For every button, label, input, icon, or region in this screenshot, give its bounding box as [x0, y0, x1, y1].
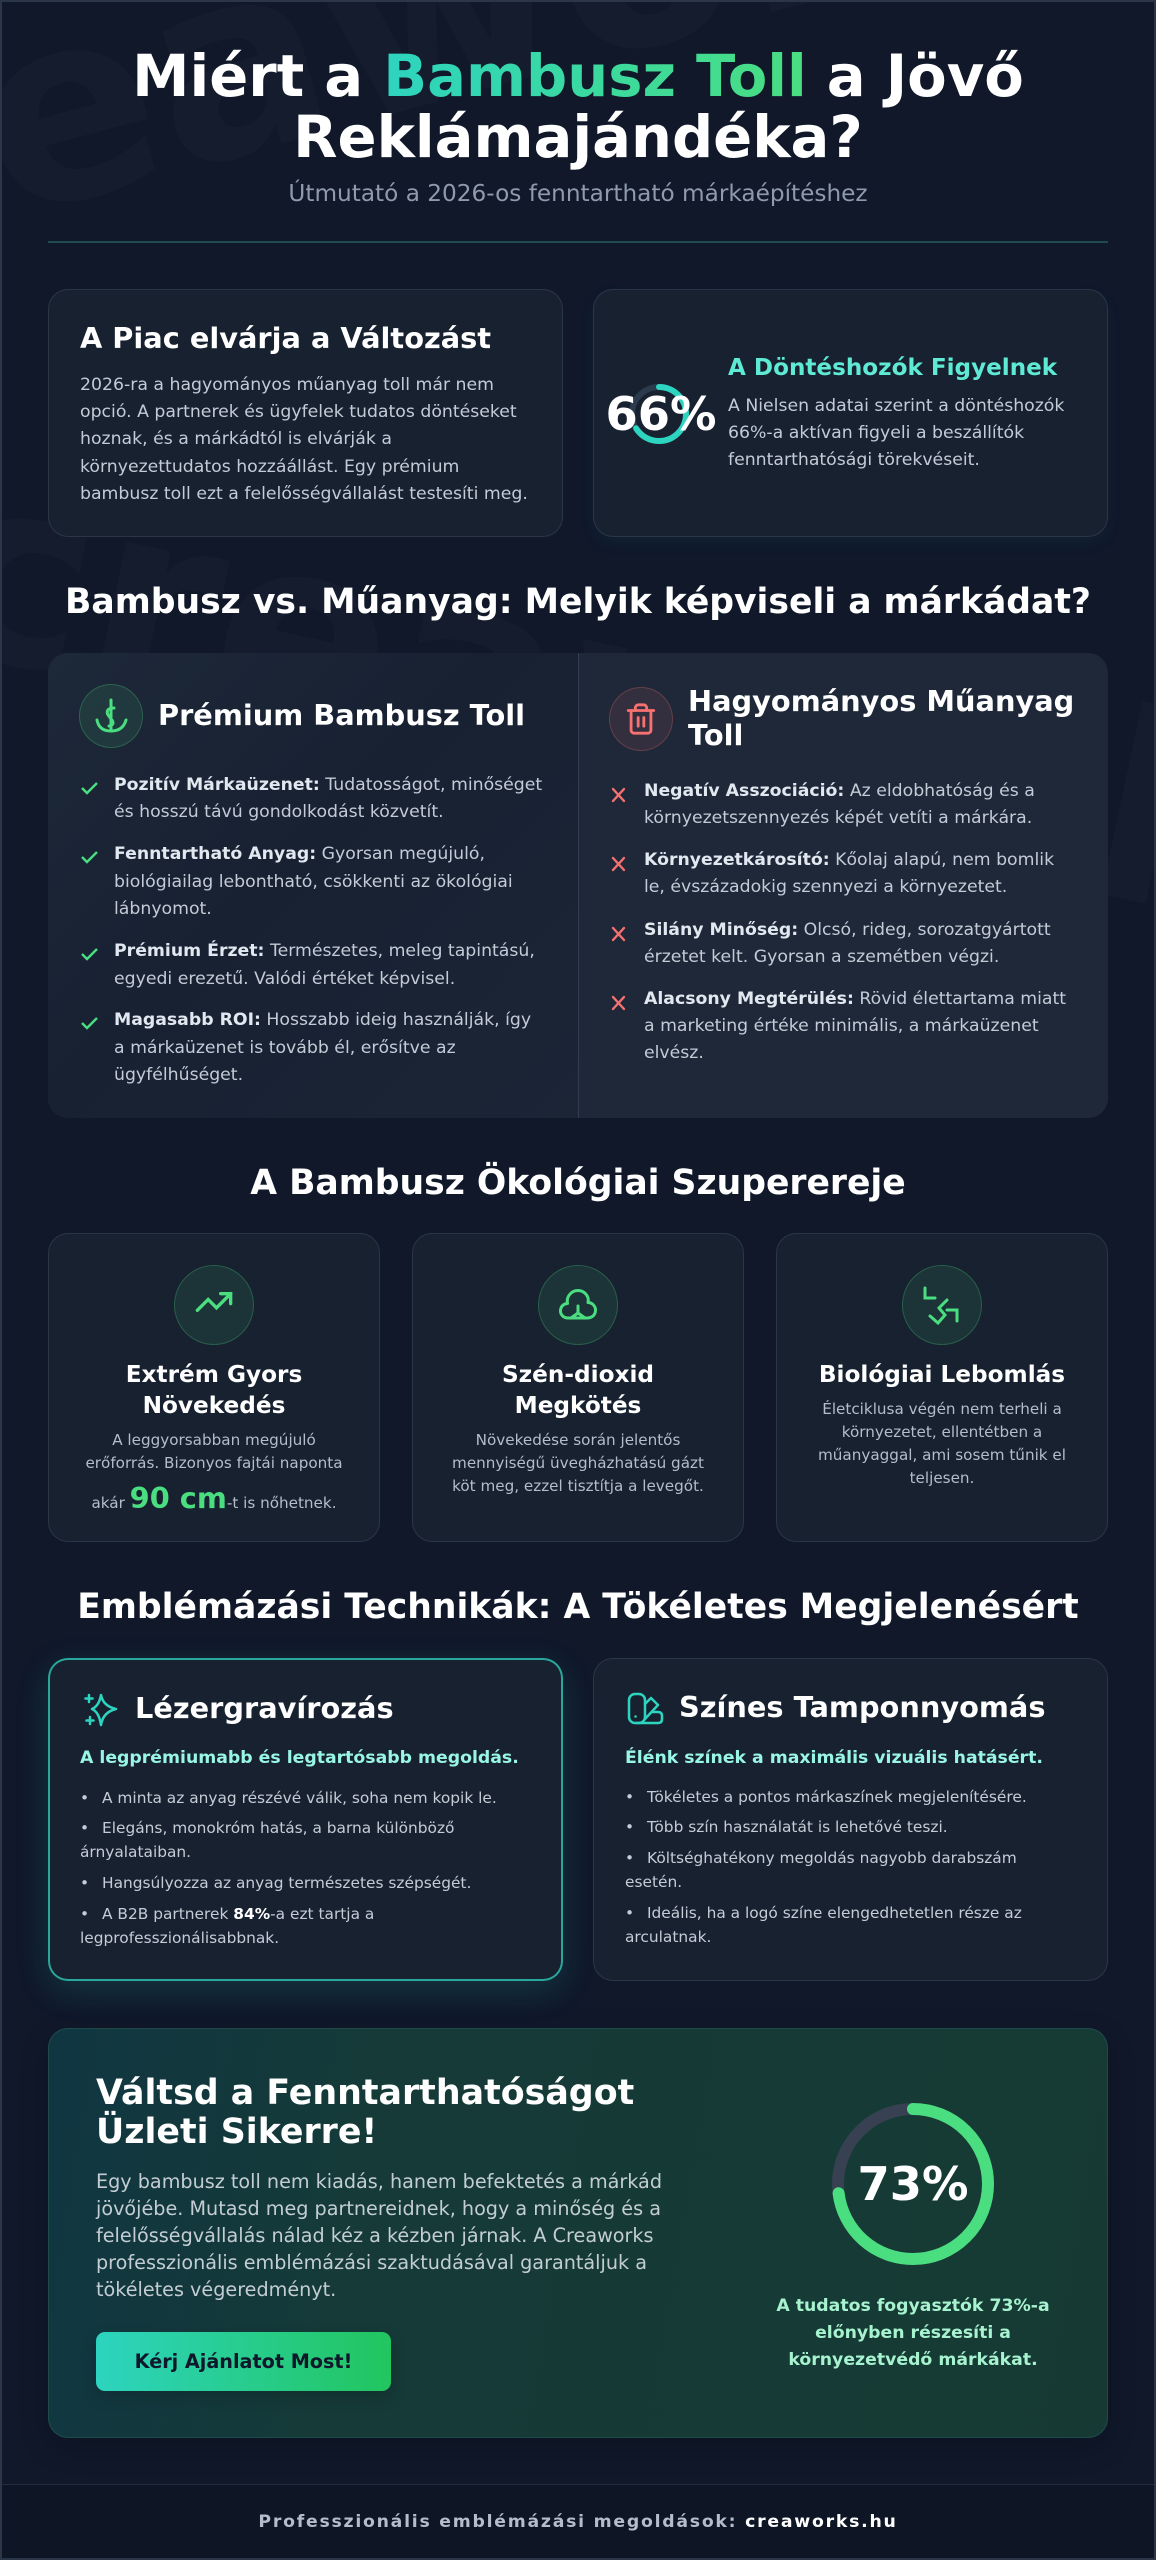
icon: sparkles	[84, 1694, 118, 1726]
technique list: •	[625, 1904, 634, 1922]
technique list: Hangsúlyozza az anyag természetes szépségét.	[102, 1874, 471, 1892]
drawback: negative association: Negatív Asszociáció: Az eldobhatóság és a	[644, 781, 1035, 801]
drawback: low return: a marketing értéke minimális, a márkaüzenet	[644, 1016, 1039, 1036]
icon: anchor	[79, 684, 143, 748]
technique list: A B2B partnerek 84%-a ezt tartja a	[102, 1905, 374, 1923]
subtitle: Útmutató a 2026-os fenntartható márkaépítéshez	[288, 180, 868, 207]
stat text: 66%-a aktívan figyeli a beszállítók	[728, 423, 1024, 443]
footer text: Professzionális emblémázási megoldások: creaworks.hu	[258, 2512, 898, 2532]
drawback: low return: Alacsony Megtérülés: Rövid élettartama miatt	[644, 989, 1066, 1009]
ring caption: A tudatos fogyasztók 73%-a	[776, 2296, 1050, 2316]
panel text: opció. A partnerek és ügyfelek tudatos döntéseket	[80, 402, 517, 422]
technique list: Elegáns, monokróm hatás, a barna különböző	[102, 1819, 454, 1837]
stat heading: A Döntéshozók Figyelnek	[728, 354, 1057, 380]
benefit: positive message: Pozitív Márkaüzenet: Tudatosságot, minőséget	[114, 775, 542, 795]
title: Reklámajándéka?	[293, 104, 863, 170]
benefit: higher ROI: ügyfélhűséget.	[114, 1065, 243, 1085]
technique heading: Lézergravírozás	[135, 1691, 394, 1725]
CTA heading	[96, 2073, 634, 2152]
technique list: Költséghatékony megoldás nagyobb darabszám	[647, 1849, 1017, 1867]
CTA text: Egy bambusz toll nem kiadás, hanem befektetés a márkád	[96, 2170, 662, 2192]
drawback: low return	[612, 989, 1066, 1063]
CTA text: professzionális emblémázási szaktudásával garantáljuk a	[96, 2250, 647, 2274]
technique list: esetén.	[625, 1873, 682, 1891]
technique list: •	[80, 1905, 89, 1923]
panel text	[80, 375, 528, 504]
panel: carbon capture	[412, 1233, 744, 1542]
icon: recycle	[902, 1265, 982, 1345]
technique list: árnyalataiban.	[80, 1843, 191, 1861]
CTA button	[96, 2332, 391, 2391]
technique list: •	[80, 1819, 89, 1837]
technique list: legprofesszionálisabbnak.	[80, 1929, 279, 1947]
technique list: A minta az anyag részévé válik, soha nem kopik le.	[102, 1788, 497, 1806]
CTA text: tökéletes végeredményt.	[96, 2278, 336, 2300]
card heading: Növekedés	[143, 1392, 285, 1418]
benefit: premium feel: Prémium Érzet: Természetes, meleg tapintású,	[114, 941, 535, 961]
card text: köt meg, ezzel tisztítja a levegőt.	[452, 1477, 704, 1495]
drawback: poor quality: Silány Minőség: Olcsó, rideg, sorozatgyártott	[644, 920, 1051, 940]
heading: bamboo vs plastic: Bambusz vs. Műanyag: Melyik képviseli a márkádat?	[65, 582, 1091, 622]
technique list: •	[625, 1849, 634, 1867]
benefit: premium feel	[81, 940, 535, 989]
panel: comparison	[48, 653, 1108, 1118]
CTA text	[96, 2170, 662, 2300]
drawback: environmental harm: Környezetkárosító: Kőolaj alapú, nem bomlik	[644, 850, 1054, 870]
card text	[85, 1430, 343, 1515]
technique list	[625, 1788, 1027, 1946]
drawback: poor quality	[612, 920, 1051, 967]
card text: teljesen.	[910, 1469, 974, 1487]
card heading: Szén-dioxid	[502, 1360, 654, 1388]
technique tagline: Élénk színek a maximális vizuális hatásért.	[625, 1748, 1043, 1768]
technique list: arculatnak.	[625, 1928, 711, 1946]
card heading: Biológiai Lebomlás	[819, 1360, 1065, 1388]
ring caption: előnyben részesíti a	[815, 2323, 1011, 2343]
stat text: A Nielsen adatai szerint a döntéshozók	[728, 396, 1064, 416]
card heading: Megkötés	[515, 1392, 641, 1418]
CTA button: Kérj Ajánlatot Most!	[135, 2350, 352, 2373]
column heading: Prémium Bambusz Toll	[158, 698, 525, 732]
panel: market expects change	[48, 289, 563, 537]
benefit: sustainable material: lábnyomot.	[114, 899, 212, 919]
technique list: •	[80, 1788, 89, 1806]
technique list: •	[80, 1874, 89, 1892]
card text: Életciklusa végén nem terheli a	[822, 1400, 1062, 1418]
CTA heading: Üzleti Sikerre!	[96, 2112, 377, 2152]
benefit: sustainable material: biológiailag lebontható, csökkenti az ökológiai	[114, 872, 513, 892]
icon: cloud tree	[538, 1265, 618, 1345]
CTA text: jövőjébe. Mutasd meg partnereidnek, hogy a minőség és a	[96, 2196, 661, 2220]
panel heading: A Piac elvárja a Változást	[80, 321, 491, 355]
ring caption: környezetvédő márkákat.	[788, 2350, 1038, 2370]
drawback: negative association: környezetszennyezés képét vetíti a márkára.	[644, 808, 1032, 828]
drawback: environmental harm: le, évszázadokig szennyezi a környezetet.	[644, 877, 1007, 897]
CTA text: felelősségvállalás nálad kéz a kézben járnak. A Creaworks	[96, 2224, 654, 2246]
drawback: environmental harm	[612, 850, 1054, 897]
technique list: •	[625, 1818, 634, 1836]
icon: swatch book	[628, 1692, 664, 1724]
card heading	[126, 1360, 302, 1418]
drawback: poor quality: érzetet kelt. Gyorsan a szemétben végzi.	[644, 947, 999, 967]
technique heading: Színes Tamponnyomás	[679, 1690, 1045, 1724]
73 percent ring	[832, 2103, 994, 2265]
benefit: sustainable material: Fenntartható Anyag: Gyorsan megújuló,	[114, 844, 485, 864]
footer	[2, 2484, 1154, 2558]
card text: műanyaggal, ami sosem tűnik el	[818, 1446, 1066, 1464]
technique list: •	[625, 1788, 634, 1806]
title	[132, 43, 1024, 170]
card text: akár 90 cm-t is nőhetnek.	[91, 1481, 337, 1515]
technique list	[80, 1788, 497, 1947]
panel text: 2026-ra a hagyományos műanyag toll már nem	[80, 375, 494, 395]
title: Miért a Bambusz Toll a Jövő	[132, 43, 1024, 110]
panel: call to action	[48, 2028, 1108, 2438]
stat text	[728, 396, 1064, 470]
icon: trending up	[174, 1265, 254, 1345]
benefit: premium feel: egyedi erezetű. Valódi értéket képvisel.	[114, 969, 455, 989]
header	[48, 43, 1108, 243]
drawback: negative association	[612, 781, 1035, 828]
panel: decision makers stat	[593, 289, 1108, 537]
panel text: környezettudatos hozzáállást. Egy prémium	[80, 457, 459, 477]
benefit: higher ROI: Magasabb ROI: Hosszabb ideig használják, így	[114, 1010, 531, 1030]
panel: laser engraving	[48, 1658, 563, 1981]
benefit: sustainable material	[81, 844, 513, 919]
panel text: hoznak, és a márkádtól is elvárják a	[80, 429, 392, 449]
card text: környezetet, ellentétben a	[842, 1423, 1042, 1441]
heading: branding techniques: Emblémázási Technikák: A Tökéletes Megjelenésért	[77, 1587, 1079, 1627]
card text	[818, 1400, 1066, 1487]
ring caption	[776, 2296, 1050, 2370]
panel: biodegradation	[776, 1233, 1108, 1542]
card text: A leggyorsabban megújuló	[112, 1430, 316, 1448]
card heading: Extrém Gyors	[126, 1360, 302, 1388]
column heading: Toll	[688, 718, 743, 752]
66 percent ring	[630, 384, 689, 444]
CTA heading: Váltsd a Fenntarthatóságot	[96, 2073, 634, 2113]
column: plastic pen	[578, 653, 1108, 1118]
card text: erőforrás. Bizonyos fajtái naponta	[85, 1454, 343, 1472]
73 percent value: 73%	[857, 2157, 969, 2211]
panel: extreme growth	[48, 1233, 380, 1542]
technique tagline: A legprémiumabb és legtartósabb megoldás.	[80, 1748, 519, 1768]
benefit: higher ROI	[81, 1010, 531, 1085]
column heading	[688, 684, 1074, 752]
card text	[452, 1430, 704, 1495]
panel: pad printing	[593, 1658, 1108, 1981]
card text: mennyiségű üvegházhatású gázt	[452, 1454, 704, 1472]
panel text: bambusz toll ezt a felelősségvállalást testesíti meg.	[80, 484, 528, 504]
icon: trash	[609, 687, 673, 751]
benefit: positive message: és hosszú távú gondolkodást közvetít.	[114, 802, 444, 822]
benefit: higher ROI: a márkaüzenet is tovább él, erősítve az	[114, 1038, 456, 1058]
drawback: low return: elvész.	[644, 1043, 704, 1063]
card heading	[502, 1360, 654, 1418]
stat text: fenntarthatósági törekvéseit.	[728, 450, 980, 470]
technique list: Több szín használatát is lehetővé teszi.	[647, 1818, 948, 1836]
column: bamboo pen	[48, 653, 578, 1118]
technique list: Tökéletes a pontos márkaszínek megjelenítésére.	[647, 1788, 1027, 1806]
66 percent value: 66%	[605, 387, 717, 441]
card text: Növekedése során jelentős	[476, 1430, 680, 1448]
heading: ecological superpower: A Bambusz Ökológiai Szuperereje	[250, 1163, 906, 1203]
technique list: Ideális, ha a logó színe elengedhetetlen része az	[647, 1904, 1022, 1922]
column heading: Hagyományos Műanyag	[688, 684, 1074, 718]
benefit: positive message	[81, 775, 542, 822]
